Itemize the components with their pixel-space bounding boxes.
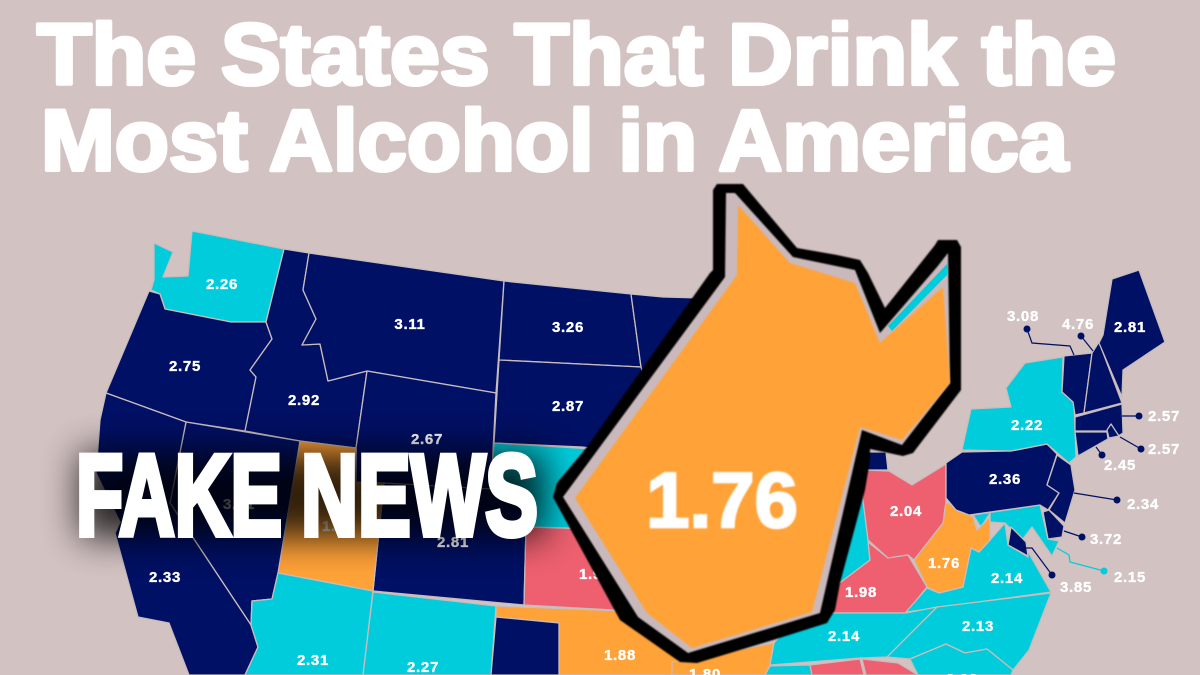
map of United States states bbox=[96, 231, 1165, 675]
state value labels: 2.36 bbox=[989, 471, 1021, 488]
state value labels: 1.76 bbox=[928, 555, 960, 572]
state: Connecticut bbox=[1075, 432, 1108, 456]
title: The States That Drink the bbox=[37, 7, 1116, 103]
state value labels: 2.04 bbox=[890, 503, 922, 520]
state value labels: 2.67 bbox=[411, 431, 443, 448]
state value labels: 2.87 bbox=[552, 398, 584, 415]
state: Pennsylvania bbox=[946, 444, 1059, 515]
state: Alabama bbox=[810, 659, 864, 675]
fake news headline bbox=[76, 432, 538, 560]
state: Montana bbox=[302, 253, 504, 393]
state: Nevada bbox=[170, 422, 300, 625]
callout: New Hampshire 4.76 bbox=[1078, 332, 1093, 351]
callout values bbox=[1007, 308, 1180, 596]
state value labels: 2.92 bbox=[288, 392, 320, 409]
big value 1.76: 1.76 bbox=[646, 456, 798, 544]
state: North Carolina bbox=[887, 593, 1051, 670]
fake news headline: FAKE bbox=[76, 432, 282, 560]
state value labels: 2.75 bbox=[169, 358, 201, 375]
state: New Hampshire bbox=[1084, 342, 1122, 413]
callout: Rhode Island 2.57 bbox=[1120, 437, 1144, 452]
enlarged West Virginia highlight bbox=[553, 184, 961, 663]
state: Wyoming bbox=[356, 371, 496, 489]
state value labels: 2.22 bbox=[1011, 417, 1043, 434]
state value labels: 1.98 bbox=[845, 584, 877, 601]
state: Colorado bbox=[373, 483, 526, 605]
state value labels: 1.88 bbox=[604, 647, 636, 664]
state value labels: 3.41 bbox=[223, 496, 255, 513]
state: Arizona bbox=[245, 573, 373, 675]
state value labels: 2.31 bbox=[297, 652, 329, 669]
state: Minnesota bbox=[630, 294, 694, 370]
state: Kentucky bbox=[832, 542, 926, 612]
state: Washington DC bbox=[1008, 527, 1028, 556]
state: Delaware bbox=[1043, 510, 1064, 539]
state: Idaho bbox=[245, 249, 367, 448]
state: New York bbox=[962, 357, 1076, 463]
title: Most Alcohol in America bbox=[41, 93, 1069, 189]
state: California bbox=[96, 393, 258, 675]
black outline bbox=[553, 184, 961, 663]
callout values: 2.57 bbox=[1148, 441, 1180, 458]
state: Massachusetts bbox=[1075, 404, 1123, 436]
state value labels: 2.33 bbox=[149, 569, 181, 586]
state: Maine bbox=[1099, 270, 1165, 397]
state: South Carolina bbox=[910, 644, 1013, 675]
gray inner edge bbox=[563, 193, 950, 653]
callout values: 3.08 bbox=[1007, 308, 1039, 325]
callout values: 3.85 bbox=[1060, 579, 1092, 596]
callout: Connecticut 2.45 bbox=[1096, 447, 1106, 458]
state: Vermont bbox=[1062, 353, 1092, 415]
state: Washington bbox=[151, 231, 284, 322]
state value labels: 1.90 bbox=[322, 518, 354, 535]
state: Iowa remnant bbox=[868, 452, 888, 470]
state: Oklahoma bbox=[496, 606, 690, 675]
state value labels: 2.26 bbox=[206, 276, 238, 293]
northeast callout labels with leader lines bbox=[1024, 326, 1144, 578]
state value labels: 2.13 bbox=[962, 618, 994, 635]
state: Georgia bbox=[862, 659, 918, 675]
callout: DC 3.85 bbox=[1026, 548, 1056, 578]
callout values: 4.76 bbox=[1062, 316, 1094, 333]
state value labels: 2.14 bbox=[991, 570, 1023, 587]
state value labels bbox=[149, 276, 1146, 675]
state: Rhode Island bbox=[1107, 424, 1119, 438]
callout: Delaware 3.72 bbox=[1064, 531, 1086, 540]
state value labels: 1.96 bbox=[579, 566, 611, 583]
state: Kansas bbox=[523, 526, 615, 610]
state: West Virginia bbox=[914, 502, 990, 593]
fake news shadow bbox=[80, 452, 545, 538]
state value labels: 3.26 bbox=[552, 319, 584, 336]
state: Indiana bbox=[839, 498, 870, 582]
state: New Mexico bbox=[363, 592, 496, 675]
callout values: 2.15 bbox=[1114, 569, 1146, 586]
state: Oregon bbox=[106, 291, 272, 431]
state: Virginia bbox=[906, 523, 1051, 612]
state: Texas bbox=[491, 617, 559, 675]
state: Nebraska bbox=[494, 442, 586, 528]
fake news headline: NEWS bbox=[301, 432, 538, 560]
callout: Maryland 2.15 bbox=[1057, 548, 1108, 574]
state: North Dakota bbox=[499, 281, 641, 367]
state: Arkansas bbox=[672, 643, 774, 675]
callout: Massachusetts 2.57 bbox=[1122, 412, 1142, 420]
state: New Jersey bbox=[1047, 455, 1075, 523]
state value labels: 2.14 bbox=[828, 628, 860, 645]
callout values: 3.72 bbox=[1090, 531, 1122, 548]
state value labels: 3.11 bbox=[394, 316, 426, 333]
state: Ohio bbox=[862, 464, 946, 560]
state: Utah bbox=[278, 441, 384, 591]
callout: New Jersey 2.34 bbox=[1074, 493, 1120, 504]
orange state fill bbox=[575, 205, 950, 648]
state value labels: 2.81 bbox=[437, 534, 469, 551]
callout values: 2.57 bbox=[1148, 408, 1180, 425]
title bbox=[37, 7, 1116, 189]
callout: Vermont 3.08 bbox=[1024, 326, 1074, 355]
state: South Dakota bbox=[494, 360, 650, 450]
state value labels: 2.81 bbox=[1114, 319, 1146, 336]
state: Tennessee bbox=[770, 607, 937, 665]
callout values: 2.34 bbox=[1127, 496, 1159, 513]
callout values: 2.45 bbox=[1104, 457, 1136, 474]
teal edge glint bbox=[888, 263, 948, 331]
state: Mississippi bbox=[765, 665, 812, 675]
state: Maryland bbox=[973, 505, 1059, 556]
